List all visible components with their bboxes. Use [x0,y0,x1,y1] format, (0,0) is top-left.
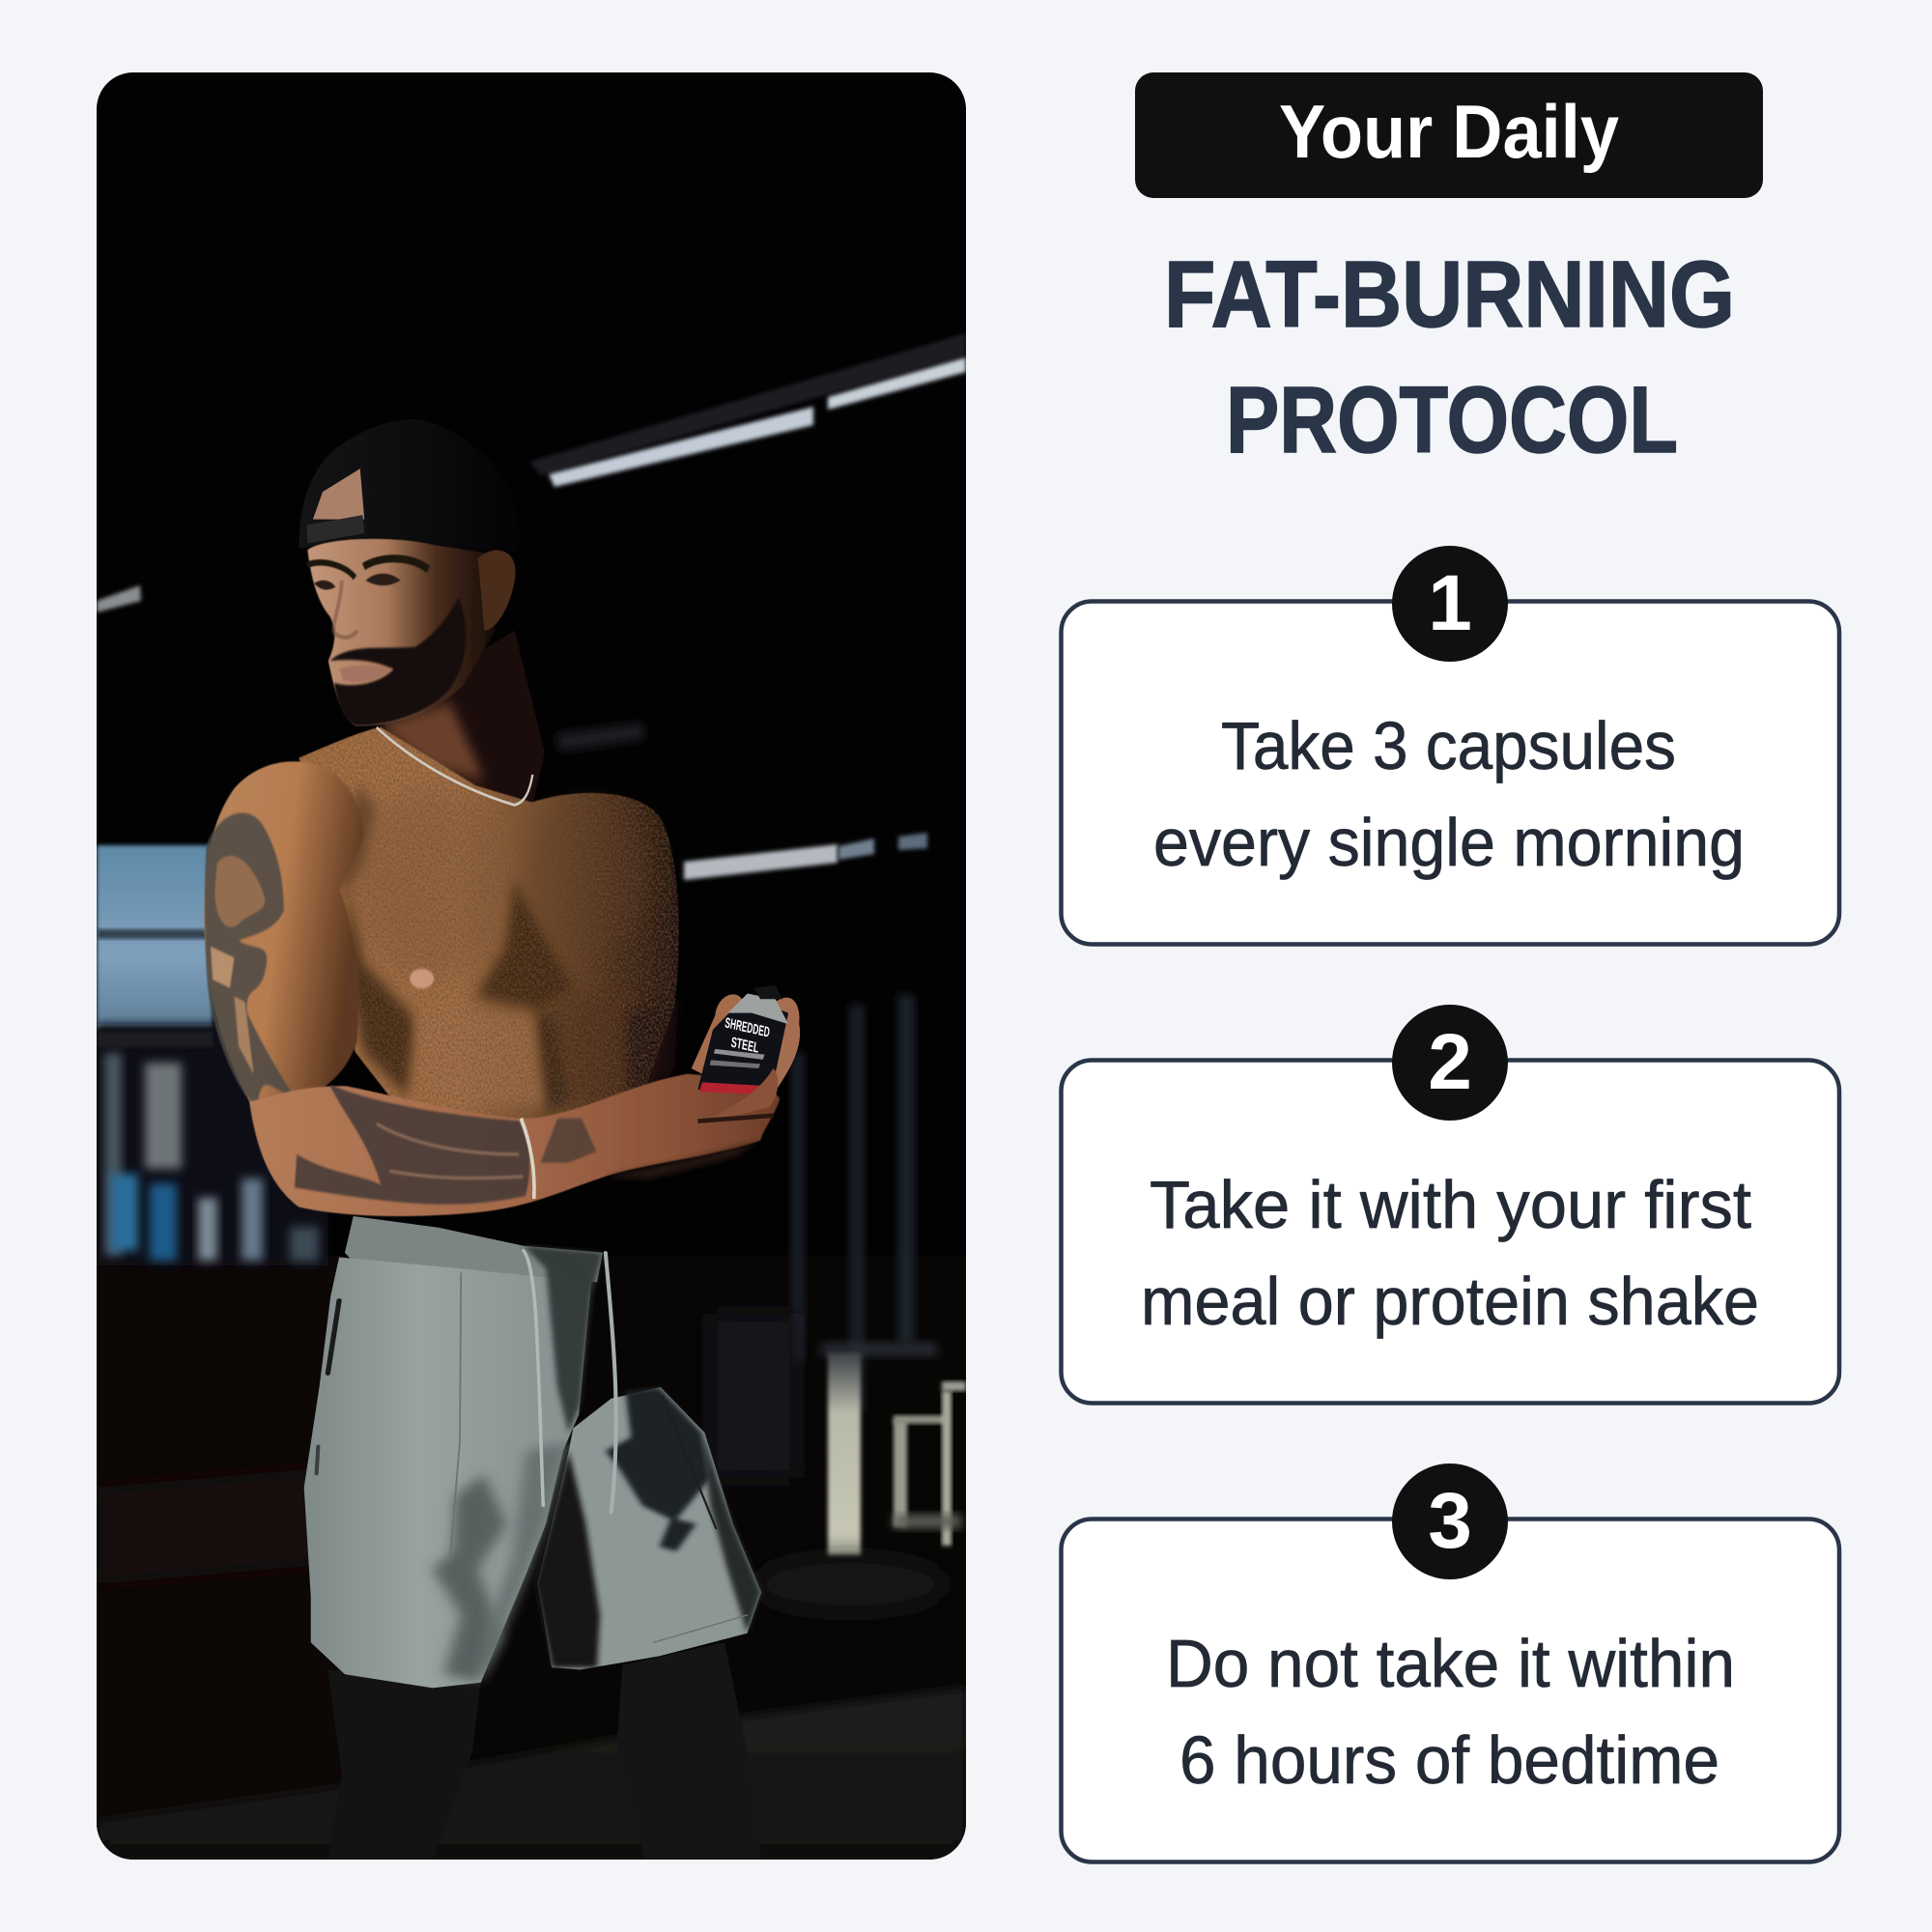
cap [298,419,519,553]
upper arm [204,761,363,1113]
panel: photo of man holding supplement bottle [97,72,966,1861]
cap strap [306,515,364,543]
chest hair texture and shadows [295,719,683,1129]
supplement bottle [692,985,800,1123]
heading: FAT-BURNING PROTOCOL [1164,242,1735,472]
step 2 text: Take it with your first [1150,1167,1751,1242]
step 3 text: Do not take it within [1166,1626,1735,1701]
bottle label text [724,1018,770,1053]
eyes and brows [306,558,428,638]
badge: Your Daily [1135,72,1763,198]
eagle tattoo [205,813,295,1107]
step 1 text [1153,708,1745,880]
beard [330,597,466,725]
step card 1 [1061,546,1839,945]
bottle label text: STEEL [730,1034,760,1056]
bracelet [521,1119,534,1199]
neck [381,631,545,808]
leggings [327,1642,761,1861]
step number 3 [1392,1463,1508,1579]
torso [298,727,679,1129]
necklace [377,727,532,805]
step card 2 [1061,1005,1839,1403]
step 2 text: meal or protein shake [1141,1264,1759,1339]
shorts right leg [534,1387,761,1670]
heading: FAT-BURNING PROTOCOL: PROTOCOL [1226,367,1678,472]
hand shadow [605,1141,760,1179]
ear [478,551,516,631]
heading: FAT-BURNING PROTOCOL: FAT-BURNING [1164,242,1735,347]
step number 3: 3 [1428,1477,1472,1565]
forearm and hand [249,1074,780,1216]
step 1 text: Take 3 capsules [1221,708,1676,783]
leggings and shorts [304,1216,761,1861]
drawstrings and seams [317,1250,748,1642]
shorts left leg [304,1246,603,1688]
step number 2 [1392,1005,1508,1121]
badge: Your Daily: Your Daily [1279,89,1619,174]
forearm tattoo [295,1084,596,1205]
step 3 text: 6 hours of bedtime [1179,1722,1719,1798]
forehead under cap [313,469,364,520]
step card 3 [1061,1463,1839,1862]
step number 1: 1 [1428,559,1472,647]
step 1 text: every single morning [1153,805,1745,880]
step number 1 [1392,546,1508,662]
step 2 text [1141,1167,1759,1339]
gym background [97,333,966,1860]
upper body [204,419,800,1216]
waistband [345,1216,603,1282]
step 3 text [1166,1626,1735,1798]
lips [340,666,391,682]
bottle label text: SHREDDED [724,1014,771,1040]
step number 2: 2 [1428,1018,1472,1106]
head: face [307,539,496,725]
